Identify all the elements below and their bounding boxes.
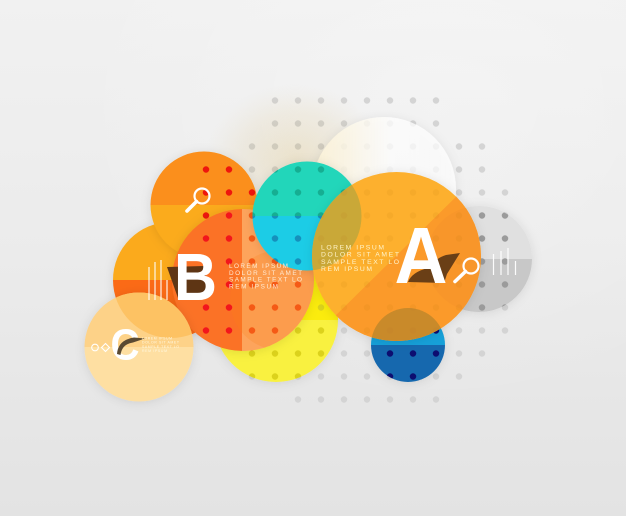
overlap: left orange under C (116, 292, 192, 338)
text block: C: DOLOR SIT AMET (142, 340, 180, 344)
text block: B (229, 263, 302, 290)
text block: C: REM IPSUM (142, 349, 167, 353)
icon: bars left orange (149, 260, 167, 300)
icon: magnifier top orange (187, 188, 210, 211)
circle: translucent white (312, 117, 456, 261)
icon: circle and diamond by C (92, 344, 110, 352)
text block: C: SAMPLE TEXT LO (142, 345, 179, 349)
circle: grey (462, 206, 534, 314)
text block: C (142, 336, 180, 353)
overlap: teal circle under A (312, 185, 362, 270)
text block: A: DOLOR SIT AMET (321, 252, 399, 259)
circle: blue (370, 328, 446, 384)
text block: B: REM IPSUM (229, 284, 278, 290)
text block: B: DOLOR SIT AMET (229, 270, 302, 277)
circle A: orange diagonal split (310, 171, 482, 343)
text block: A: LOREM IPSUM (321, 244, 384, 252)
label: letter B with swoosh: B (174, 240, 217, 315)
circle: yellow (218, 270, 340, 384)
dot grid: base grey dots (206, 100, 506, 400)
circle C: pale orange (84, 290, 194, 404)
text block: B: LOREM IPSUM (229, 263, 288, 270)
circle: left orange (112, 224, 196, 336)
circle: teal to cyan (250, 161, 352, 274)
circle B: red-orange split (170, 208, 316, 354)
text block: A (321, 244, 399, 273)
overlap: grey circle under A (462, 208, 481, 310)
text block: A: REM IPSUM (321, 266, 372, 273)
text block: A: SAMPLE TEXT LO (321, 259, 399, 266)
label: letter A with swoosh: A (394, 211, 448, 300)
text block: C: LOREM IPSUM (142, 336, 172, 340)
warm glow behind circles (205, 84, 385, 236)
overlap: blue circle under A (372, 308, 441, 341)
label: letter C with swoosh: C (110, 320, 140, 370)
icon: bars grey circle (494, 248, 516, 275)
text block: B: SAMPLE TEXT LO (229, 276, 302, 284)
overlap: faint dots under A (206, 100, 506, 400)
circle: top orange (149, 151, 258, 254)
icon: magnifier A (455, 258, 478, 282)
